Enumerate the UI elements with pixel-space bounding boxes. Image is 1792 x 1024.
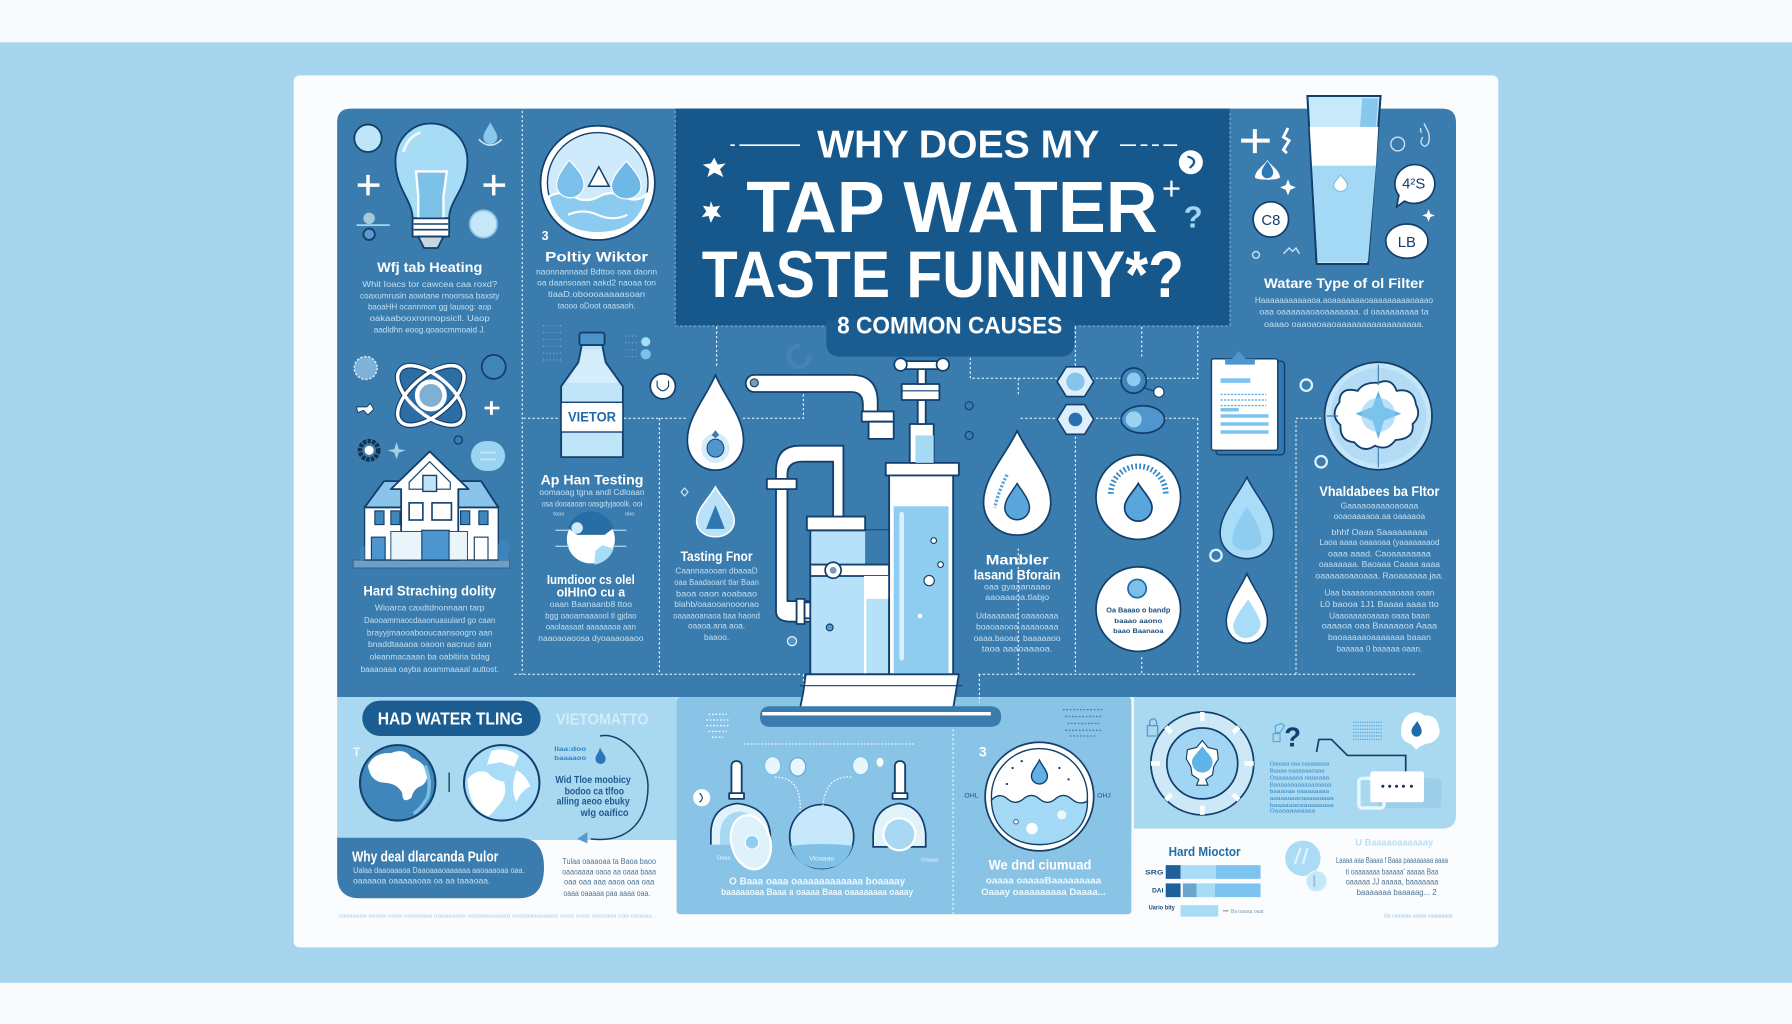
text block: Baaaaaaaaaaaaaaaaa (1270, 782, 1332, 788)
text block (562, 857, 656, 898)
icon: atom (388, 355, 474, 436)
text block: coaxumrusin aowtane rnoorssa baxsty (360, 290, 500, 300)
text block: baaaaaaa baaaaag... 2 (1357, 888, 1437, 897)
icons: plus signs (358, 175, 505, 195)
heading: We dnd ciumuad (989, 858, 1091, 874)
title line three: TASTE FUNNIY*? (702, 238, 1184, 312)
icon: large drop (984, 431, 1051, 535)
heading: Wfj tab Heating (377, 260, 482, 276)
text block: bnaddtaaaoa oaoon aacnuo aan (368, 639, 492, 649)
text block: bgg oaoamaaaool tl gjdao (545, 610, 637, 620)
icon: compass ring (1151, 712, 1254, 815)
title line one: WHY DOES MY (817, 124, 1100, 167)
text block: aaaaaaaaoaaaaaaaaa (1270, 796, 1335, 802)
text block: Udaaaaaad oaaaoaaa (976, 610, 1059, 620)
icon: flask middle (790, 805, 854, 869)
icon: node (641, 337, 651, 359)
text block (1270, 762, 1335, 815)
icon: node (357, 213, 390, 240)
text block (1255, 295, 1433, 329)
lower right light panel (1134, 697, 1456, 829)
text block: oaaaaa JJ aaaaa, baaaaaaa (1346, 878, 1439, 887)
panel: clipboard and drops column (1210, 351, 1443, 653)
text block: Baaaa oaaaaaaoaaa (1270, 769, 1325, 775)
panel: second column (536, 126, 675, 643)
text block (360, 279, 500, 335)
heading: Watare Type of ol Filter (1264, 276, 1424, 292)
icon: lock (1147, 719, 1158, 736)
heading: Ap Han Testing (541, 473, 643, 489)
text block: naaoaoaoosa dyoaaaoaaoo (538, 633, 644, 643)
subtitle: 8 COMMON CAUSES (837, 313, 1062, 340)
heading: Vhaldabees ba Fltor (1319, 484, 1440, 500)
icon: bubble LB: LB (1398, 235, 1416, 251)
icon: gear (360, 441, 378, 459)
heading: lasand Bforain (974, 567, 1061, 583)
text block: oa daansoaan aakd2 naoaa ton (537, 278, 656, 288)
tank base (760, 674, 1001, 727)
caption (721, 877, 914, 897)
text block (673, 566, 760, 642)
text block: oaaaoa oaa Baaaaaoa Aaaa (1322, 621, 1437, 631)
bar chart: Ba oaaaa oaar (1231, 909, 1264, 915)
icon: globe gauge (555, 511, 626, 565)
icon: squiggle (1283, 128, 1289, 153)
icon: globe one (360, 745, 435, 821)
text block: baoa oaon aoabaao (676, 589, 757, 599)
icon: dotted cluster (706, 714, 729, 737)
text block: Caannaaooan dbaaaD (675, 566, 758, 576)
icon: bubble C8: C8 (1261, 213, 1280, 229)
icon: label bubble (471, 441, 505, 471)
lower middle panel (677, 697, 1131, 914)
text block (538, 599, 644, 643)
icon: sparkle (681, 488, 688, 496)
icon: sparkles (1280, 179, 1435, 222)
callout (337, 838, 544, 898)
panel: lower middle flasks (693, 710, 1111, 897)
icon: small mark (1273, 723, 1285, 742)
text block: Oaaaaaaaaaaa (1270, 809, 1316, 815)
text block: oaa gyaaanaaao (984, 582, 1051, 592)
text block: Daooammaocdaaonuasulard go caan (364, 615, 496, 625)
side labels (964, 793, 1111, 800)
panel: fourth column (974, 367, 1181, 653)
label: VIETOMATTO (556, 712, 649, 729)
caption: baaaaaoaa Baaa a oaaaa Baaa oaaaaaaaa oaaay (721, 887, 914, 897)
small label: baaaaoo (554, 755, 586, 762)
text block: Gaaaaoaaaaoaoaaa (1341, 501, 1419, 511)
icon: drinking glass (1307, 96, 1381, 264)
text block: Whit Ioacs tor cawcea caa roxd? (362, 279, 497, 289)
side labels: OHJ (1097, 793, 1111, 800)
decorative dotted label line (744, 743, 914, 745)
icon: circle with drop (1096, 455, 1181, 539)
white card (294, 75, 1498, 947)
inlet pipe (767, 446, 843, 624)
tank: small filter (787, 517, 889, 674)
icon: curved arrow (577, 736, 648, 843)
icon: bubbles (1285, 841, 1327, 891)
text block: L0 baooa 1J1 Baaaa aaaa tto (1320, 599, 1439, 609)
icons: dot grids (543, 326, 639, 360)
icon: clipboard (1211, 351, 1285, 455)
icon: dot (454, 436, 462, 444)
text block: Oaaay oaaaaaaaaa Daaaa... (981, 887, 1106, 897)
icon: dotted cluster (1063, 710, 1104, 736)
icon: water porthole (985, 742, 1094, 851)
footnote: Oa oaaaaaa oaaaa oaaaaaaaa (1384, 914, 1453, 920)
heading: Tasting Fnor (681, 549, 753, 565)
text block: baaaaaaoaaaaaaaaa (1270, 803, 1335, 809)
tank: main cylinder (886, 358, 959, 674)
text block: oaan Baanaanb8 ttoo (550, 599, 632, 609)
icon: ring (1210, 379, 1327, 561)
panel: hard water lower left (337, 701, 658, 920)
text block: brayyjmaooabooucaansoogro aan (367, 627, 493, 637)
text block: toon (553, 511, 564, 517)
pill heading (362, 701, 541, 736)
icon: white drop (1226, 574, 1267, 643)
callout: oaaaaoa oaaaaaoaa oa aa taaaoaa. (353, 876, 490, 885)
text block: oaaao oaaoaoaaoaaaaaaaaaaaaaaaaa. (1264, 319, 1424, 329)
text block: oakaabooxronnopsicll. Uaop (370, 313, 490, 323)
faucet and filter illustration (746, 346, 1001, 727)
text block: taooo oDoot oaasaoh. (558, 301, 635, 311)
number: 3 (979, 745, 987, 760)
title line two: TAP WATER (746, 168, 1158, 248)
heading: Hard Straching dolity (363, 583, 496, 599)
text block (981, 875, 1106, 897)
grid connector lines (514, 111, 1417, 914)
text block: blahb/oaaooanooonao (674, 599, 759, 609)
icon: water drop (479, 122, 502, 145)
heading: Hard Mioctor (1169, 845, 1241, 859)
text block: aaoaaaoa.tlabjo (985, 592, 1049, 602)
callout: Why deal dlarcanda Pulor (352, 850, 498, 866)
icon: question mark: ? (1284, 721, 1301, 752)
text block: oleanmacaaan ba oabltiria bdag (370, 651, 490, 661)
heading: Poltiy Wiktor (545, 250, 649, 266)
text block: Oaaaaaaoa oaaaaaa (1270, 775, 1330, 781)
panel: hard water meter (1145, 838, 1453, 920)
main dark panel (337, 109, 1456, 697)
icon: small circle (482, 355, 506, 379)
text block: wlg oaifico (580, 808, 629, 819)
icon: bubble 4S (1395, 165, 1435, 207)
icon: divider tick (448, 773, 450, 792)
text block: ooaoaaaaoa.aa oaaaaoa (1334, 511, 1425, 521)
bar chart: Uario bity (1149, 905, 1175, 912)
icons: hexagons (1057, 367, 1094, 434)
icons: capsule nodes (1121, 368, 1165, 433)
text block (539, 487, 645, 517)
text block: Wid Tloe moobicy (555, 775, 631, 786)
pill heading: HAD WATER TLING (378, 709, 523, 729)
text block: Tulaa oaaaoaa ta Baoa baoo (562, 857, 656, 866)
text block: baaaaa 0 baaaaa oaan. (1337, 643, 1422, 653)
text block: baoaaaaaoaaaaaaa baaan (1328, 632, 1431, 642)
text block: obo (625, 511, 634, 517)
title block (675, 109, 1230, 357)
text block: alling aeoo ebuky (557, 797, 630, 808)
icon: cloud with drop (1401, 712, 1440, 750)
text block: bodoo ca tlfoo (565, 786, 624, 797)
footnote: oaaaaaaa oaaaa oaaa oaaaaaaa oaaaaaaaa oaaaaaaaaaaa oaaaaaaaaaaaa oaaa oaaa oaaaaaa oaa oaaaaa... (338, 914, 658, 920)
icon: water circle (541, 126, 655, 240)
text block: osa dooaaoan oasgdyjaoolk. ooi (542, 498, 642, 508)
text block: boaoaaooa.aaaaoaaa (976, 622, 1059, 632)
icon: drop (1220, 477, 1274, 559)
small labels (717, 855, 939, 864)
lower left light panel (337, 697, 677, 840)
panel: glass (1241, 96, 1435, 329)
icon: bubble C8 (1253, 202, 1289, 237)
icon: light bulb (395, 123, 467, 248)
text block: Laaaa aaa Baaaa f Baaa paaaaaaaa aaaa (1336, 856, 1448, 865)
text block: naonnannaad Bdttoo oaa daonn (536, 266, 657, 276)
text block: Uaa baaaaoaoaaaaoaaa oaan (1325, 587, 1434, 597)
text block: bhhf Oaaa Saaaaaaaaa (1331, 527, 1428, 537)
bar chart (1145, 865, 1264, 917)
panel: third column (673, 375, 760, 642)
icon: small drop (697, 487, 734, 537)
icon: U badge (650, 374, 675, 399)
icon: T mark: T (353, 746, 361, 760)
icon: small bubble (354, 125, 382, 152)
text block: Laoa aaaa oaaaoaa (yaaaaaaaod (1319, 537, 1440, 547)
text block: oaaaaoanaoa baa haond (673, 610, 760, 620)
bar chart: SRG (1145, 869, 1163, 876)
text block: oaaa oaaaaa paa aaaa oaa. (563, 889, 650, 898)
icons: small rings (789, 346, 973, 439)
text block: oaa oaaaaaaoaoaaaaaaa. d oaaaaaaaaa ta (1259, 306, 1429, 316)
caption: O Baaa oaaa oaaaaaaaaaaaa boaaaay (729, 877, 905, 888)
icons: molecule cluster (354, 357, 377, 415)
heading: Manbler (986, 553, 1049, 569)
text block: Haaaaaaaaaaaoa.aoaaaaaaaoaaaaaaaaaoaaao (1255, 295, 1433, 305)
text block (361, 602, 499, 674)
text block: oaaaaaaa. Baoaaa Caaaa aaaa (1319, 559, 1440, 569)
text block: oaolaasaat aaaaaaoa aan (546, 622, 636, 632)
text block: Wioarca caxdtdnonnaan tarp (375, 602, 485, 612)
heading: oIHInO cu a (557, 586, 626, 600)
text block: oaaoaaaa oaoa aa oaaa baaa (562, 867, 656, 876)
text block: Oaaaaa oaa oaaaaaaaa (1270, 762, 1330, 768)
text block: baaaoaa oaaaaaaaa (1270, 789, 1330, 795)
icon: data grid (1353, 722, 1382, 739)
icon: circle with text: baaao aaono (1114, 618, 1162, 625)
icon: flask middle: Vioaaao (809, 856, 834, 863)
title decorations (702, 145, 1203, 234)
icon: badge (693, 789, 710, 806)
icons: small lenses (765, 757, 883, 811)
icon: circle with text: Oa Baaao o bandp (1106, 606, 1171, 615)
icon: bubble LB (1386, 224, 1428, 258)
small label: Ilaa:doo (554, 746, 586, 753)
subtitle tab (826, 320, 1074, 357)
small labels: Oaaa (717, 855, 731, 861)
text block: oomaoag tgna andl Cdloaan (539, 487, 645, 497)
title decorations: ? (1184, 199, 1203, 234)
number: 3 (542, 229, 549, 243)
icon: white device box (1359, 771, 1441, 808)
small label (554, 746, 586, 762)
icon: plus (485, 401, 499, 415)
faucet spout (746, 375, 894, 439)
text block (555, 775, 631, 819)
faint heading: U Baaaaoaaaaaay (1355, 838, 1434, 848)
icon: droplet node (1255, 160, 1280, 180)
text block: Uaaoaaaaoaaaa oaaa baan (1329, 610, 1430, 620)
icon: circle with text (1096, 567, 1181, 651)
text block: taoa aaaoaaaoa. (982, 643, 1053, 653)
icon: bubble 4S: 4²S (1402, 177, 1425, 193)
icons: small marks (1253, 123, 1429, 258)
icon: globe two (464, 745, 539, 821)
icon: house (353, 451, 510, 568)
bar chart: DAI (1152, 888, 1164, 895)
callout: Ualaa daaoaaaoa Daaoaaaoaaaaaa aaoaaaoaa oaa. (353, 866, 525, 875)
panel: bulb column (353, 122, 510, 674)
text block: tiaaD.oboooaaaaasoan (548, 289, 645, 299)
icon: circle with text: baao Baanaoa (1113, 628, 1164, 635)
text block: oaa Baadaoant tlar Baan (674, 577, 759, 587)
text block: aadldhn eoog.qoaocmmoaid J. (374, 325, 486, 335)
small labels: Oaaaa (921, 858, 939, 864)
icon: flask right (873, 761, 926, 850)
text block: oaa oaa aaa aaoa oaa oaa (564, 878, 655, 887)
text block: oaaa.baoaa. baaaaaoo (974, 633, 1061, 643)
icon: flask left (711, 761, 777, 874)
icon: filter flower circle (1325, 362, 1432, 470)
icon: plus (1241, 129, 1270, 153)
text block (1336, 856, 1448, 897)
icon: large white drop (687, 375, 744, 470)
panel: lower right diagram (1147, 712, 1441, 815)
text block: ti oaaaaaaa baaaaa' aaaaa Baa (1346, 867, 1439, 876)
connector line (1317, 739, 1406, 771)
icon: sparkle (387, 442, 406, 459)
text block: oaaoa.ana aoa. (688, 621, 745, 631)
text block: baaoo. (704, 632, 729, 642)
text block (536, 266, 657, 311)
icon: glowing circle (470, 210, 497, 238)
text block: oaaa aaad. Caoaaaaaaaa (1328, 549, 1431, 559)
text block (1315, 501, 1443, 653)
icon: water bottle (561, 333, 623, 457)
text block: oaaaa oaaaaBaaaaaaaaa (986, 875, 1102, 885)
icon: water bottle: VIETOR (568, 410, 616, 425)
text block: oaaaaaoaaoaaa. Raoaaaaaa jaa. (1315, 570, 1443, 580)
heading: Iumdioor cs olel (547, 573, 635, 587)
text block (974, 582, 1061, 653)
text block: baaaoaaa oayba aoammaaaal auttost. (361, 664, 499, 674)
side labels: OHL (964, 793, 979, 800)
icon: drop (595, 747, 606, 764)
text block: baoaHH ocannmon gg Iausog: aop (368, 302, 492, 312)
